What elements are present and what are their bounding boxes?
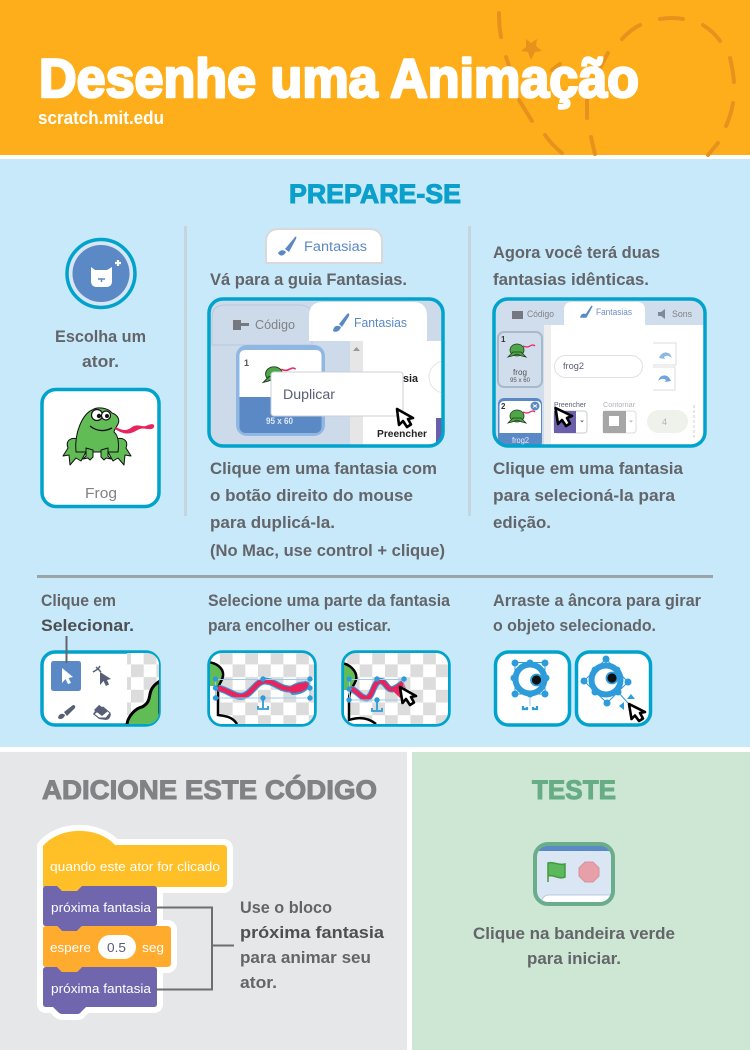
card: eye rotated <box>576 652 650 725</box>
text: click select: Clique em <box>41 591 116 610</box>
select button <box>51 661 81 691</box>
text: select part: Selecione uma parte da fantasia <box>208 591 450 610</box>
heading: prepare-se: PREPARE-SE <box>289 179 461 209</box>
text: click a costume <box>210 459 445 560</box>
icon: cursor <box>400 687 416 705</box>
screenshot: select costume: Contornar <box>603 402 636 409</box>
card: eye selected <box>496 652 570 725</box>
text: drag anchor <box>493 591 701 635</box>
heading: add this code: ADICIONE ESTE CÓDIGO <box>42 774 377 805</box>
card: selected tongue <box>205 652 315 725</box>
text: use the block <box>240 898 385 992</box>
card: select tool <box>42 652 160 726</box>
text: use the block: para animar seu <box>240 948 371 967</box>
card: shrunk tongue <box>339 652 449 725</box>
block: wait: espere <box>50 940 91 955</box>
reshape icon <box>100 672 111 686</box>
text: use the block: próxima fantasia <box>240 923 385 942</box>
screenshot: duplicate costume: Fantasias <box>354 316 407 330</box>
icon: cursor <box>629 704 645 721</box>
website: scratch.mit.edu <box>38 108 164 128</box>
frog illustration <box>63 408 154 465</box>
screenshot: duplicate costume: sia <box>403 373 419 385</box>
block: next costume <box>43 886 157 931</box>
screenshot: select costume: frog <box>513 368 527 377</box>
text: click a costume: para duplicá-la. <box>210 513 335 532</box>
text: choose a sprite: Escolha um <box>55 327 146 346</box>
text: two identical costumes: fantasias idênticas. <box>493 270 649 289</box>
text: choose a sprite <box>55 327 146 371</box>
frog label: Frog <box>85 485 117 502</box>
code blocks <box>43 831 227 1014</box>
screenshot: duplicate costume: Duplicar <box>283 386 335 402</box>
screenshot: duplicate costume: Preencher <box>377 429 427 440</box>
bracket connector <box>156 908 234 990</box>
block: wait: seg <box>142 940 164 955</box>
icon: choose sprite <box>67 240 135 308</box>
screenshot: duplicate costume: Código <box>255 317 295 332</box>
screenshot: select costume: Código <box>527 309 554 319</box>
text: choose a sprite: ator. <box>82 352 119 371</box>
screenshot: select costume: Preencher <box>554 402 587 409</box>
screenshot: select costume: 4 <box>662 417 667 427</box>
icon: green flag panel <box>535 844 613 904</box>
text: use the block: ator. <box>240 973 277 992</box>
text: click the green flag: Clique na bandeira verde <box>473 924 675 943</box>
text: click a costume to edit <box>493 459 684 532</box>
panel: header <box>0 0 750 155</box>
text: drag anchor: Arraste a âncora para girar <box>493 591 701 610</box>
text: select part: para encolher ou esticar. <box>208 616 391 635</box>
brush icon <box>58 705 75 719</box>
text: click the green flag <box>473 924 675 968</box>
screenshot: select costume <box>494 299 706 448</box>
text: two identical costumes: Agora você terá duas <box>493 243 660 262</box>
screenshot: select costume: frog2 <box>563 361 584 371</box>
screenshot: select costume: frog2 <box>512 436 530 445</box>
screenshot: select costume: Sons <box>672 309 692 319</box>
screenshot: select costume: 2 <box>501 402 506 411</box>
text: use the block: Use o bloco <box>240 898 332 917</box>
text: two identical costumes <box>493 243 660 289</box>
block: next costume: próxima fantasia <box>51 981 152 996</box>
icon: cursor <box>556 408 572 426</box>
column dividers <box>37 226 713 576</box>
block: wait: 0.5 <box>107 940 126 955</box>
text: click a costume to edit: edição. <box>493 513 551 532</box>
title: Desenhe uma Animação <box>39 47 639 109</box>
text: click a costume: (No Mac, use control + clique) <box>210 541 445 560</box>
heading: test: TESTE <box>532 775 616 805</box>
text: click a costume: o botão direito do mouse <box>210 486 413 505</box>
white block outline <box>43 831 227 1014</box>
text: click a costume to edit: para selecioná-la para <box>493 486 676 505</box>
text: go to costumes tab: Vá para a guia Fantasias. <box>210 270 407 289</box>
block: wait <box>43 926 171 972</box>
block: next costume <box>43 967 157 1014</box>
screenshot: duplicate costume: 1 <box>244 358 249 368</box>
screenshot: duplicate costume: 95 x 60 <box>266 416 293 426</box>
text: click a costume: Clique em uma fantasia com <box>210 459 437 478</box>
icon: cursor <box>397 409 413 427</box>
text: select part <box>208 591 450 635</box>
text: click select <box>41 591 134 635</box>
decorative dashed swirl and star <box>499 13 734 155</box>
screenshot: duplicate costume <box>209 299 461 446</box>
stop sign <box>579 862 599 882</box>
screenshot: select costume: 95 x 60 <box>510 378 531 384</box>
screenshot: select costume: Fantasias <box>596 307 632 317</box>
screenshot: select costume: 1 <box>501 335 506 344</box>
tab: fantasias: Fantasias <box>304 239 367 254</box>
block: when this sprite clicked <box>43 831 227 892</box>
block: next costume: próxima fantasia <box>51 900 152 915</box>
pointer line <box>66 636 68 663</box>
card: frog sprite <box>42 390 159 506</box>
text: click a costume to edit: Clique em uma fantasia <box>493 459 684 478</box>
text: click the green flag: para iniciar. <box>527 949 621 968</box>
green flag <box>548 862 565 882</box>
text: drag anchor: o objeto selecionado. <box>493 616 656 635</box>
eraser icon <box>93 705 111 720</box>
text: click select: Selecionar. <box>41 616 134 635</box>
tab: fantasias <box>266 229 382 263</box>
block: when this sprite clicked: quando este ator for clicado <box>50 859 220 874</box>
